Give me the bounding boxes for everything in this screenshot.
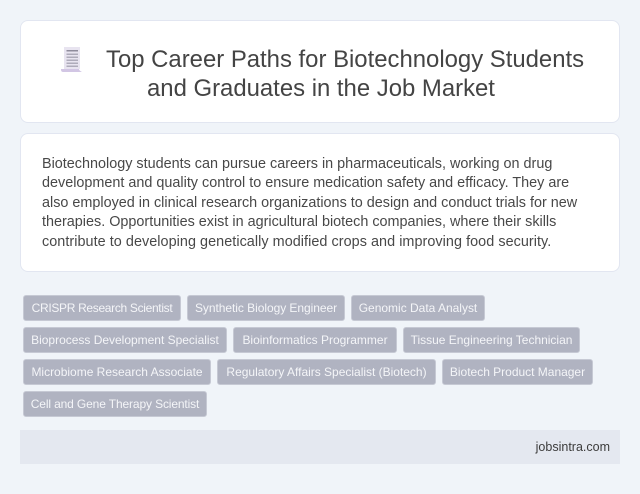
tag: Cell and Gene Therapy Scientist [31, 397, 199, 411]
tag [403, 327, 580, 353]
tag [23, 295, 181, 321]
text block: description: also employed in clinical research organizations to design and conduct trials for new [42, 195, 577, 211]
tag: Synthetic Biology Engineer [195, 301, 337, 315]
tag [23, 327, 227, 353]
tag [351, 295, 485, 321]
title: Top Career Paths for Biotechnology Students [106, 46, 584, 73]
tag [217, 359, 436, 385]
tag: Regulatory Affairs Specialist (Biotech) [226, 365, 427, 379]
title [106, 46, 584, 102]
text block: description: development and quality control to ensure medication safety and efficacy. They are [42, 175, 569, 191]
tag: Genomic Data Analyst [359, 301, 477, 315]
text block: description: contribute to developing genetically modified crops and improving food security. [42, 234, 551, 250]
title: and Graduates in the Job Market [147, 75, 495, 102]
tag: Biotech Product Manager [450, 365, 585, 379]
panel: title card [20, 20, 620, 123]
tag: CRISPR Research Scientist [32, 301, 172, 315]
text block: description: Biotechnology students can pursue careers in pharmaceuticals, working on drug [42, 156, 552, 172]
tag: Bioinformatics Programmer [242, 333, 388, 347]
text block: description [42, 156, 578, 250]
tag [187, 295, 345, 321]
tag [23, 359, 211, 385]
footer bar [20, 430, 620, 464]
tag [233, 327, 397, 353]
footer text: jobsintra.com [536, 440, 610, 454]
panel: description [20, 133, 620, 272]
tag: Tissue Engineering Technician [411, 333, 572, 347]
tag: Microbiome Research Associate [31, 365, 203, 379]
text block: description: therapies. Opportunities exist in agricultural biotech companies, where their skills [42, 214, 556, 230]
tag [23, 391, 207, 417]
tag list [23, 295, 593, 417]
icon: document scroll [61, 47, 82, 72]
tag: Bioprocess Development Specialist [31, 333, 219, 347]
tag [442, 359, 593, 385]
